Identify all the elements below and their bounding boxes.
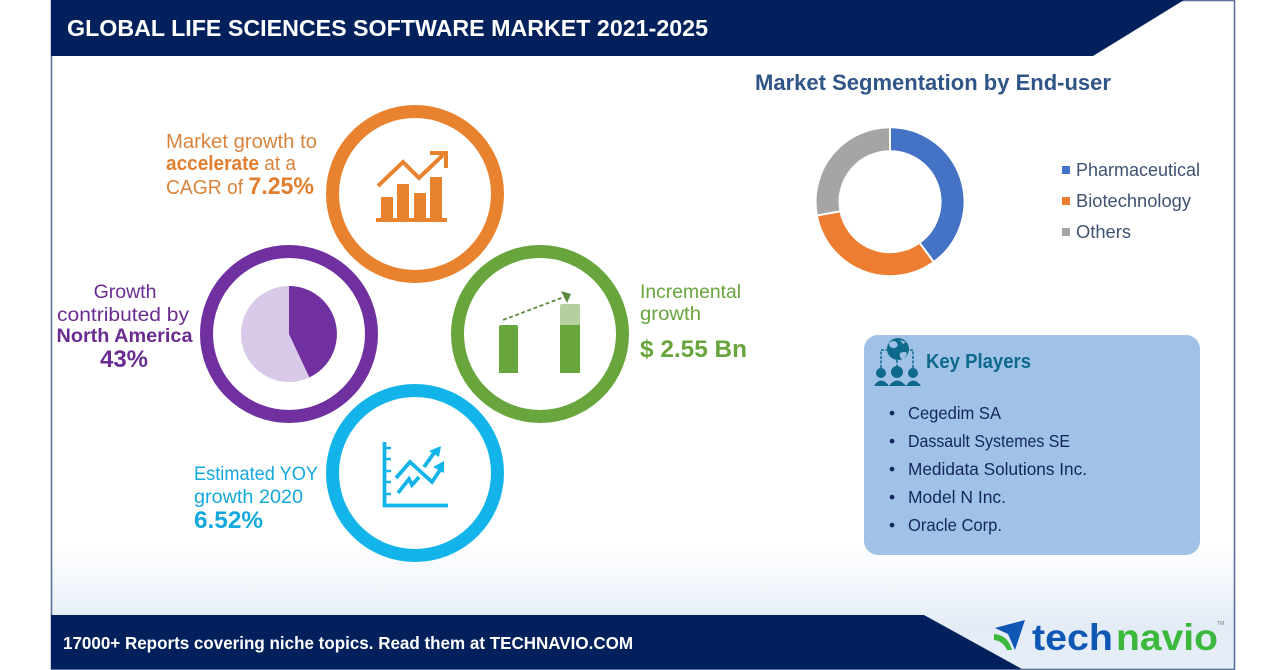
footer banner bbox=[51, 615, 1022, 669]
text: market growth: accelerate at a bbox=[166, 153, 297, 175]
text: yoy growth: growth 2020 bbox=[194, 486, 303, 508]
text: north america bbox=[56, 281, 193, 373]
logo: technavio: navio bbox=[1116, 617, 1218, 658]
text: yoy growth: 6.52% bbox=[194, 507, 263, 534]
list: companies: • bbox=[889, 459, 895, 479]
list: companies: • bbox=[889, 487, 895, 507]
text: north america: 43% bbox=[100, 346, 148, 373]
pie: 43 percent bbox=[241, 286, 337, 382]
ring: incremental growth bbox=[458, 252, 622, 416]
text: yoy growth bbox=[194, 463, 318, 534]
list: companies: • bbox=[889, 403, 895, 423]
heading: key players: Key Players bbox=[926, 351, 1031, 373]
ring: market growth bbox=[332, 112, 498, 276]
text: yoy growth: Estimated YOY bbox=[194, 463, 318, 485]
text: north america: North America bbox=[56, 325, 193, 347]
list: companies: Cegedim SA bbox=[908, 403, 1001, 423]
donut chart bbox=[814, 126, 953, 265]
list: companies: • bbox=[889, 431, 895, 451]
icon: growth bars with arrow bbox=[376, 153, 447, 222]
legend: Pharmaceutical bbox=[1076, 160, 1200, 180]
legend: Biotechnology bbox=[1076, 191, 1191, 211]
logo: technavio: TM bbox=[1217, 621, 1224, 627]
text: incremental growth: Incremental bbox=[640, 281, 741, 303]
title: GLOBAL LIFE SCIENCES SOFTWARE MARKET 2021-2025 bbox=[67, 15, 708, 41]
icon: globe and people bbox=[874, 338, 921, 386]
icon: line chart with arrows bbox=[384, 442, 448, 506]
panel: key players bbox=[864, 335, 1200, 555]
text: incremental growth: $ 2.55 Bn bbox=[640, 336, 747, 363]
list: companies bbox=[889, 403, 1087, 535]
text: market growth: CAGR of 7.25% bbox=[166, 173, 314, 200]
text: north america: contributed by bbox=[57, 304, 189, 326]
list: companies: Medidata Solutions Inc. bbox=[908, 459, 1087, 479]
list: companies: • bbox=[889, 515, 895, 535]
text: market growth: Market growth to bbox=[166, 131, 317, 153]
header banner bbox=[51, 0, 1184, 56]
heading: market segmentation: Market Segmentation by End-user bbox=[755, 70, 1111, 95]
text: incremental growth: growth bbox=[640, 303, 701, 325]
legend: Others bbox=[1076, 222, 1131, 242]
list: companies: Model N Inc. bbox=[908, 487, 1006, 507]
footer text: 17000+ Reports covering niche topics. Read them at TECHNAVIO.COM bbox=[63, 633, 633, 653]
list: companies: Dassault Systemes SE bbox=[908, 431, 1070, 451]
legend bbox=[1062, 160, 1200, 242]
ring: yoy growth bbox=[332, 390, 498, 556]
ring: north america bbox=[206, 252, 372, 416]
logo: technavio bbox=[994, 617, 1224, 658]
text: north america: Growth bbox=[94, 281, 156, 303]
text: market growth bbox=[166, 131, 317, 200]
logo: technavio: tech bbox=[1032, 617, 1113, 658]
text: incremental growth bbox=[640, 281, 747, 363]
icon: bars with dashed arrow bbox=[499, 291, 580, 373]
list: companies: Oracle Corp. bbox=[908, 515, 1002, 535]
